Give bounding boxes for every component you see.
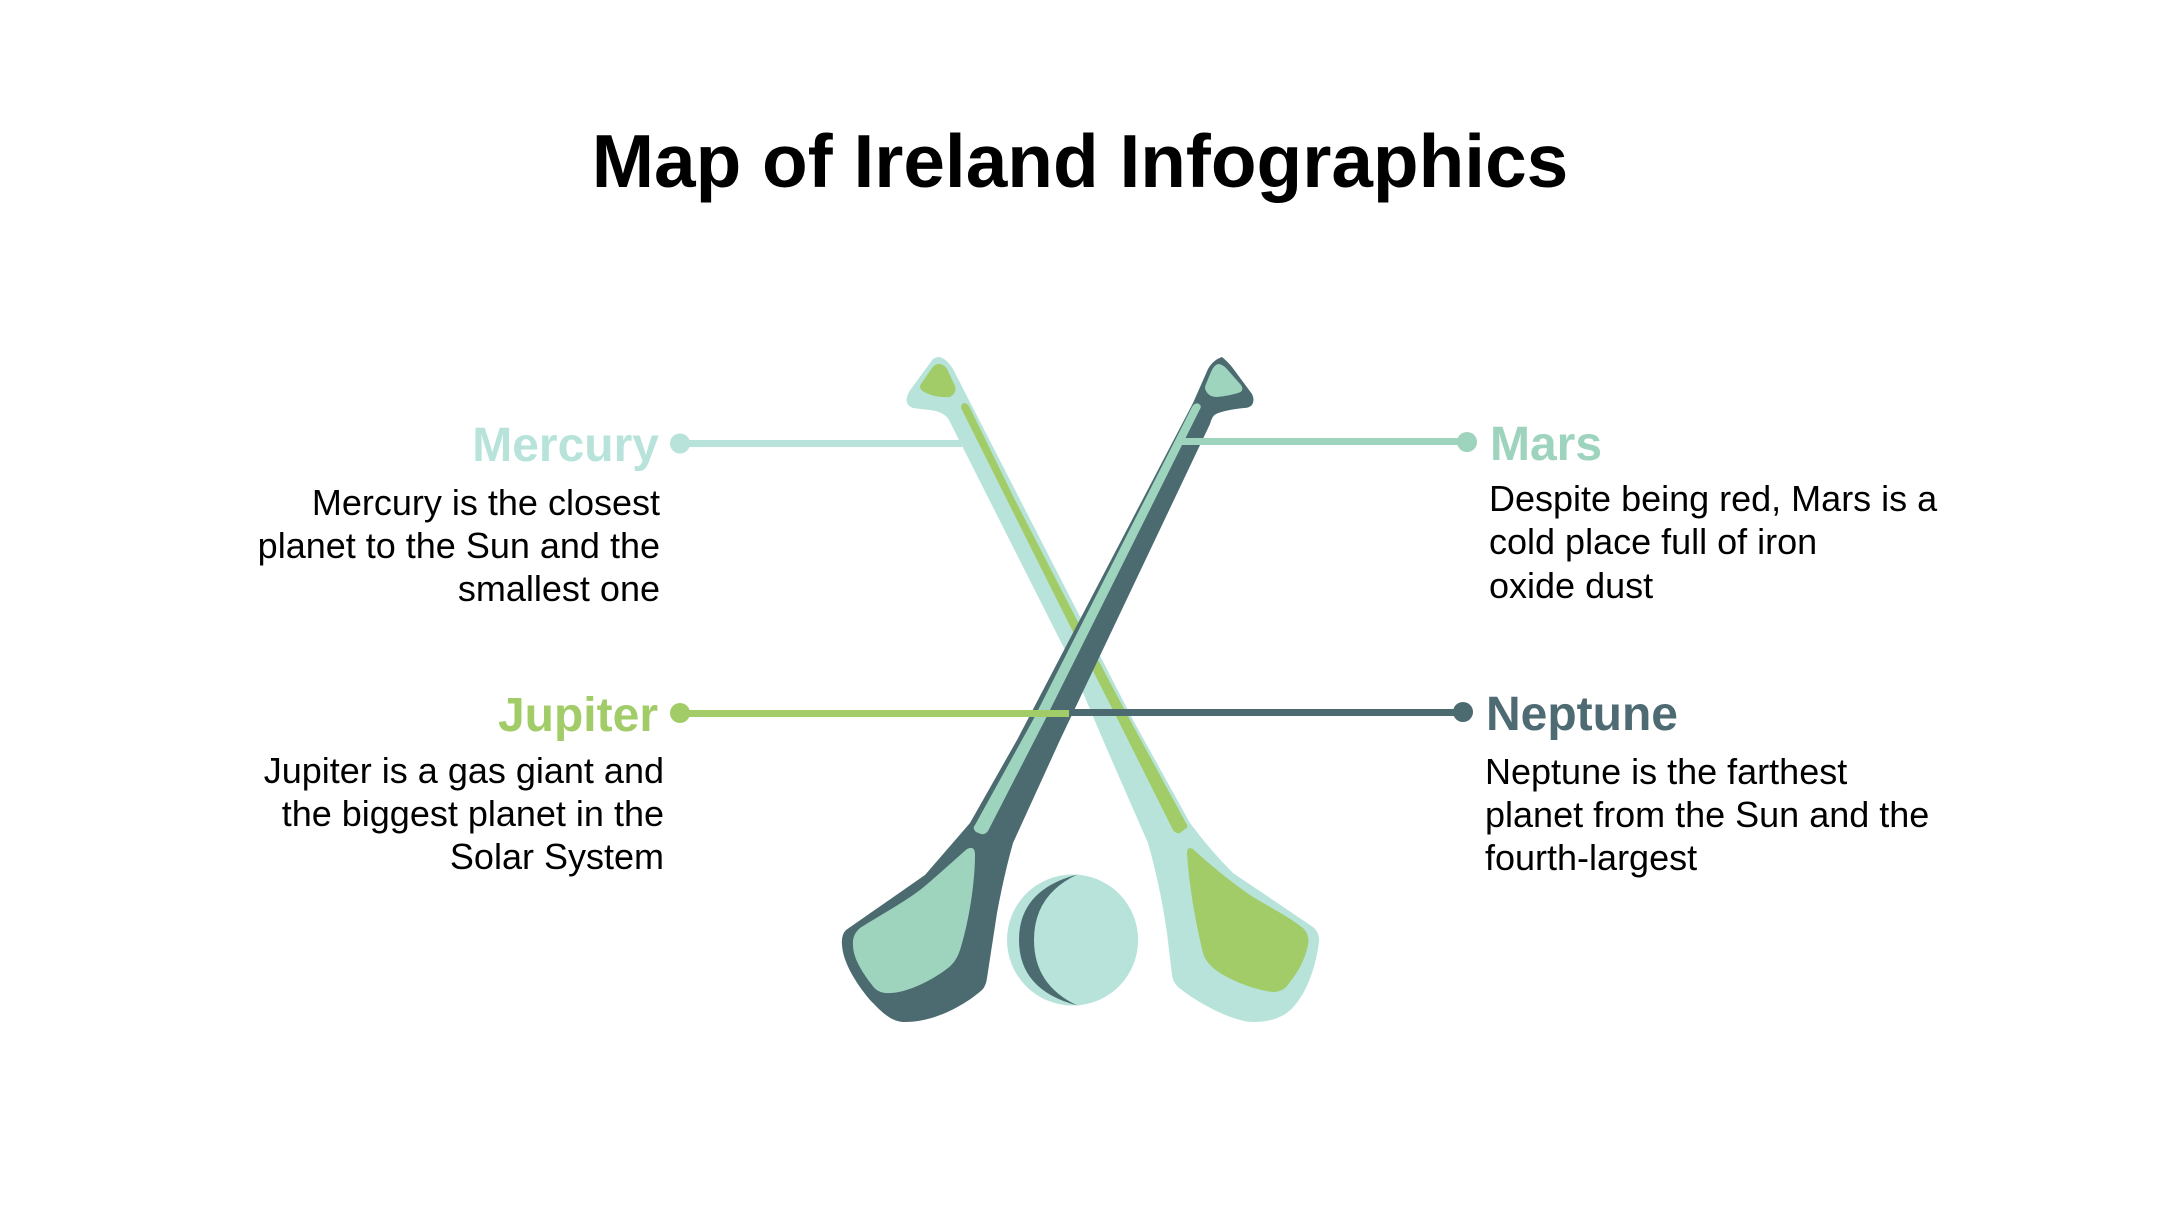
panel: Jupiter: Solar System	[450, 836, 664, 877]
panel: Jupiter: Jupiter	[498, 689, 658, 742]
panel: Neptune: planet from the Sun and the	[1485, 794, 1929, 835]
title: Map of Ireland Infographics	[592, 119, 1568, 203]
icon: dark hurling stick	[842, 357, 1254, 1022]
panel: Neptune: Neptune is the farthest	[1485, 751, 1847, 792]
panel: Jupiter: the biggest planet in the	[282, 793, 664, 834]
panel: Mars: Mars	[1490, 418, 1602, 471]
panel: Neptune	[1485, 688, 1929, 878]
connector: Jupiter	[670, 703, 1069, 723]
panel: Mercury: planet to the Sun and the	[258, 525, 660, 566]
panel: Mars: Despite being red, Mars is a	[1489, 478, 1938, 519]
connector: Neptune	[1069, 702, 1473, 722]
panel: Jupiter	[264, 689, 664, 877]
icon: light hurling stick	[907, 357, 1319, 1022]
connector: Mercury	[670, 434, 962, 454]
icon: sliotar ball	[1007, 874, 1138, 1006]
panel: Mercury: smallest one	[458, 568, 660, 609]
panel: Mars: oxide dust	[1489, 565, 1653, 606]
connector: Mars	[1182, 432, 1477, 452]
panel: Jupiter: Jupiter is a gas giant and	[264, 750, 664, 791]
panel: Mars: cold place full of iron	[1489, 521, 1817, 562]
panel: Mercury: Mercury	[472, 419, 659, 472]
panel: Mercury: Mercury is the closest	[312, 482, 660, 523]
panel: Neptune: fourth-largest	[1485, 837, 1697, 878]
panel: Mars	[1489, 418, 1938, 606]
panel: Neptune: Neptune	[1486, 688, 1678, 741]
panel: Mercury	[258, 419, 660, 609]
